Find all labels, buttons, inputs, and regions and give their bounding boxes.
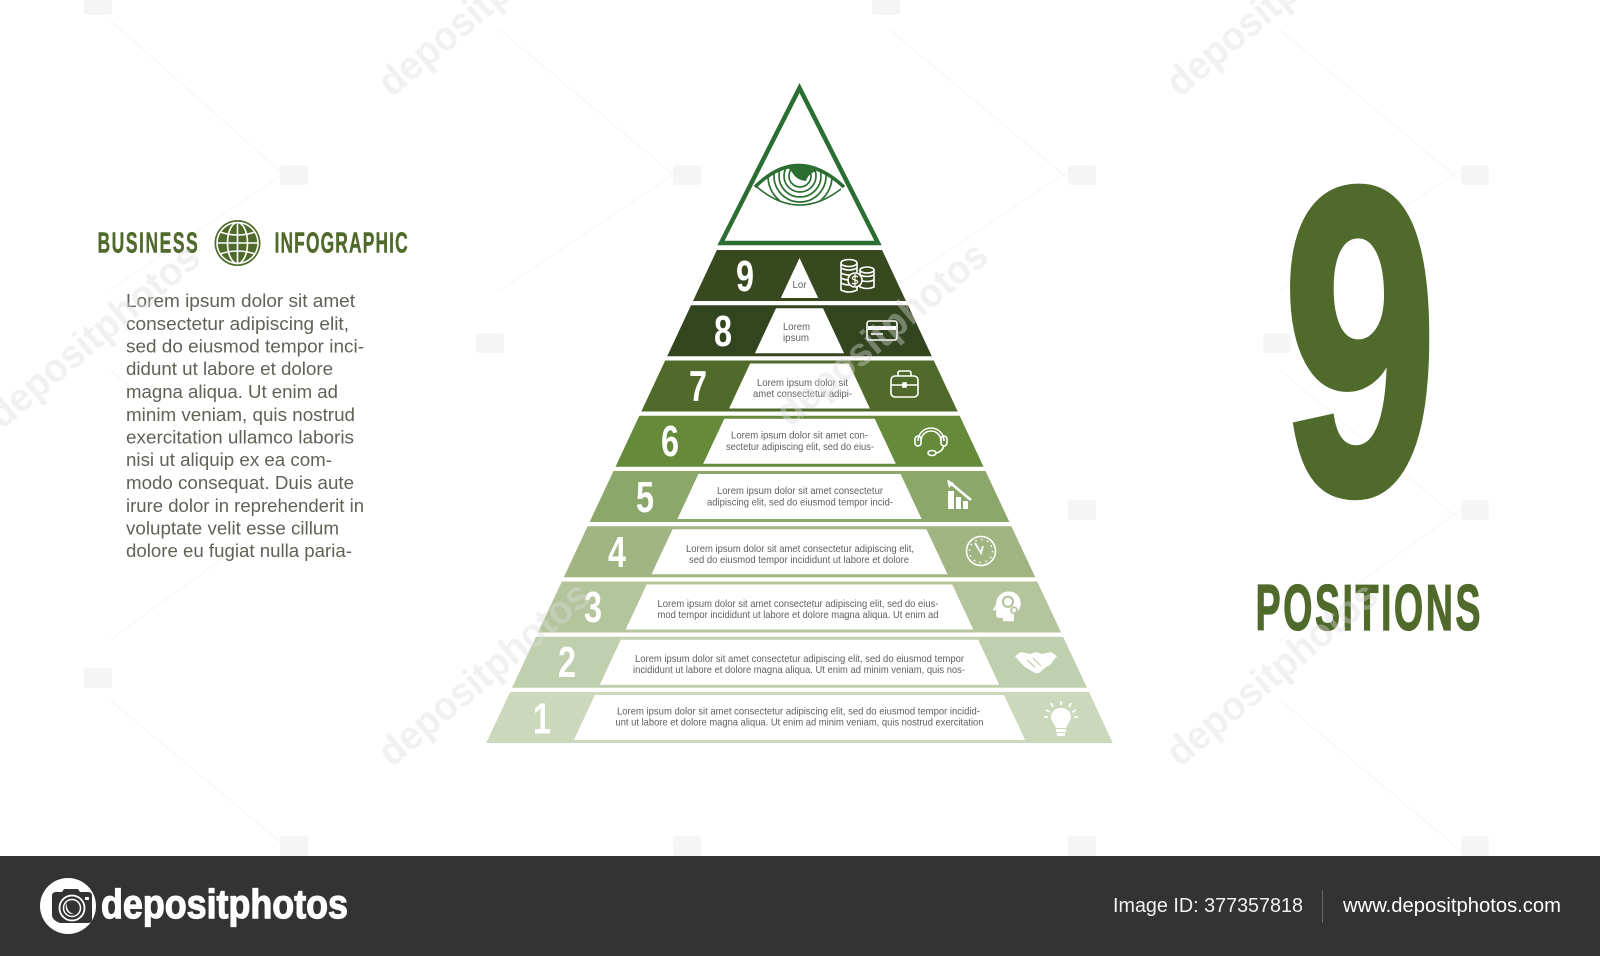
band 6: Lorem ipsum dolor sit amet con- (731, 430, 868, 442)
text block: description: dolore eu fugiat nulla paria- (126, 540, 352, 561)
band 5: adipiscing elit, sed do eiusmod tempor incid- (707, 496, 893, 508)
band 3: 3 (584, 583, 602, 632)
band 5: Lorem ipsum dolor sit amet consectetur (717, 485, 883, 497)
text block: description: minim veniam, quis nostrud (126, 404, 355, 425)
band 6: sectetur adipiscing elit, sed do eius- (726, 441, 874, 453)
band 6 (616, 416, 984, 467)
band 2 (512, 637, 1087, 688)
band 1: unt ut labore et dolore magna aliqua. Ut enim ad minim veniam, quis nostrud exercitation (616, 716, 984, 728)
pyramid top: triangle with eye (721, 88, 878, 243)
text block: description: nisi ut aliquip ex ea com- (126, 449, 332, 470)
text: depositphotos (1158, 573, 1386, 775)
band 7: Lorem ipsum dolor sit (757, 377, 848, 389)
text block: description: didunt ut labore et dolore (126, 358, 333, 379)
band 3: mod tempor incididunt ut labore et dolore magna aliqua. Ut enim ad (658, 609, 939, 621)
band 7 (641, 360, 958, 412)
website: www.depositphotos.com (1342, 895, 1561, 917)
icon: briefcase (891, 371, 918, 397)
text: depositphotos (768, 233, 996, 435)
icon: bar chart falling (947, 480, 971, 509)
text block: description: magna aliqua. Ut enim ad (126, 381, 338, 402)
text block: description: consectetur adipiscing elit, (126, 313, 349, 334)
icon: handshake (1015, 652, 1057, 673)
text block: description (126, 290, 364, 561)
band 5: 5 (636, 473, 654, 522)
band 7: amet consectetur adipi- (753, 388, 852, 400)
icon: globe (214, 220, 260, 266)
icon: credit card (867, 321, 897, 340)
heading: business infographic: BUSINESS (98, 227, 198, 260)
band 4: Lorem ipsum dolor sit amet consectetur adipiscing elit, (686, 543, 914, 555)
band 9: Lor (792, 279, 807, 291)
text block: description: sed do eiusmod tempor inci- (126, 336, 364, 356)
band 3: Lorem ipsum dolor sit amet consectetur adipiscing elit, sed do eius- (658, 598, 939, 610)
text block: description: Lorem ipsum dolor sit amet (126, 290, 355, 311)
band 4: sed do eiusmod tempor incididunt ut labore et dolore (689, 554, 909, 566)
band 9: 9 (736, 252, 754, 301)
icon: light bulb (1044, 701, 1078, 736)
band 1: 1 (533, 694, 551, 744)
text block: description: irure dolor in reprehenderit in (126, 495, 364, 516)
heading: business infographic: INFOGRAPHIC (274, 227, 408, 260)
band 1 (486, 692, 1113, 744)
band 5 (590, 471, 1009, 522)
band 8: ipsum (783, 332, 809, 344)
footer bar (0, 856, 1600, 956)
logo: wordmark: depositphotos (101, 881, 348, 927)
band 7: 7 (689, 362, 707, 411)
heading: positions: POSITIONS (1256, 573, 1481, 645)
band 8: 8 (714, 307, 732, 356)
image id: Image ID: 377357818 (1113, 895, 1303, 917)
band 2: incididunt ut labore et dolore magna aliqua. Ut enim ad minim veniam, quis nos- (633, 664, 965, 676)
band 3 (538, 582, 1061, 632)
icon: eye (754, 164, 846, 206)
band 8 (667, 305, 932, 356)
text block: description: exercitation ullamco laboris (126, 426, 354, 448)
icon: head with gears (993, 592, 1021, 621)
heading: business infographic (98, 220, 408, 266)
band 6: 6 (661, 417, 679, 466)
icon: headset (915, 428, 947, 456)
icon: coins (841, 260, 874, 292)
icon: clock (966, 536, 996, 566)
big number 9: 9 (1283, 98, 1437, 585)
band 8: Lorem (783, 321, 810, 333)
text block: description: voluptate velit esse cillum (126, 518, 339, 538)
text block: description: modo consequat. Duis aute (126, 472, 354, 493)
text: depositphotos (370, 573, 598, 775)
band 4 (564, 526, 1035, 577)
band 4: 4 (608, 528, 626, 577)
band 1: Lorem ipsum dolor sit amet consectetur adipiscing elit, sed do eiusmod tempor incidid- (617, 706, 980, 718)
band 2: Lorem ipsum dolor sit amet consectetur adipiscing elit, sed do eiusmod tempor (635, 653, 964, 665)
logo: camera icon (40, 878, 96, 934)
band 2: 2 (558, 638, 576, 687)
band 9 (693, 250, 906, 301)
